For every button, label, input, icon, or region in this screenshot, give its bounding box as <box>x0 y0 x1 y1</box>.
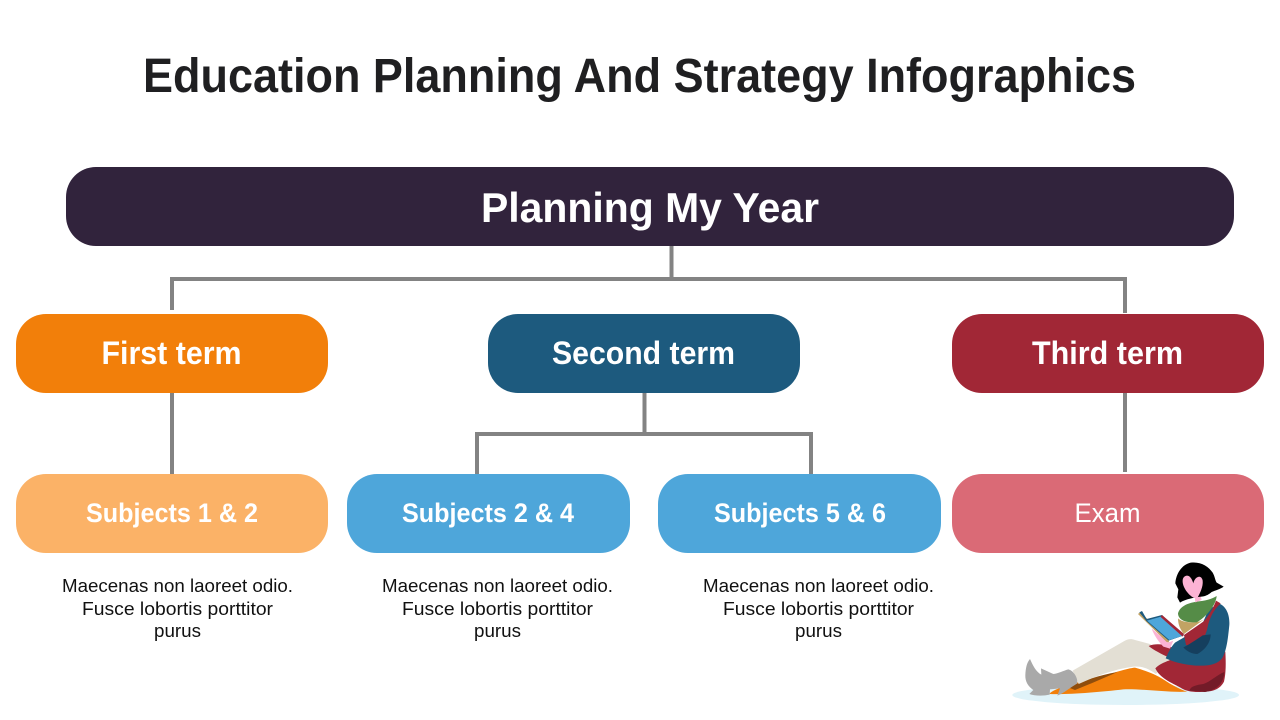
subject box: Subjects 1 & 2: Subjects 1 & 2 <box>86 498 258 528</box>
text block: third column: purus <box>795 621 842 641</box>
text block: third column: Fusce lobortis porttitor <box>723 599 914 619</box>
text block: first column: Maecenas non laoreet odio. <box>62 576 293 596</box>
text block: third column <box>703 576 934 641</box>
term box: Second term <box>488 314 800 393</box>
connector line: third term to exam <box>1123 393 1127 472</box>
exam box: Exam <box>1074 498 1140 528</box>
text block: second column: purus <box>474 621 521 641</box>
connector lines: second term to subjects <box>477 393 811 474</box>
subject box: Subjects 2 & 4 <box>347 474 630 553</box>
subject box: Subjects 5 & 6: Subjects 5 & 6 <box>714 498 886 528</box>
subject box: Subjects 2 & 4: Subjects 2 & 4 <box>402 498 574 528</box>
text block: first column: purus <box>154 621 201 641</box>
text block: third column: Maecenas non laoreet odio. <box>703 576 934 596</box>
header bar: Planning My Year: Planning My Year <box>481 184 819 231</box>
header bar: Planning My Year <box>66 167 1234 246</box>
text block: second column <box>382 576 613 641</box>
term box: First term: First term <box>102 335 242 371</box>
text block: first column <box>62 576 293 641</box>
text block: second column: Fusce lobortis porttitor <box>402 599 593 619</box>
connector lines: top level <box>172 246 1125 313</box>
text block: second column: Maecenas non laoreet odio. <box>382 576 613 596</box>
connector line: first term to subjects <box>170 393 174 474</box>
term box: Third term: Third term <box>1032 335 1183 371</box>
term box: First term <box>16 314 328 393</box>
subject box: Subjects 5 & 6 <box>658 474 941 553</box>
subject box: Subjects 1 & 2 <box>16 474 328 553</box>
term box: Third term <box>952 314 1264 393</box>
illustration: woman reading on a cushion <box>1012 562 1239 705</box>
title: Education Planning And Strategy Infographics <box>143 50 1136 103</box>
text block: first column: Fusce lobortis porttitor <box>82 599 273 619</box>
exam box <box>952 474 1264 553</box>
term box: Second term: Second term <box>552 335 735 371</box>
